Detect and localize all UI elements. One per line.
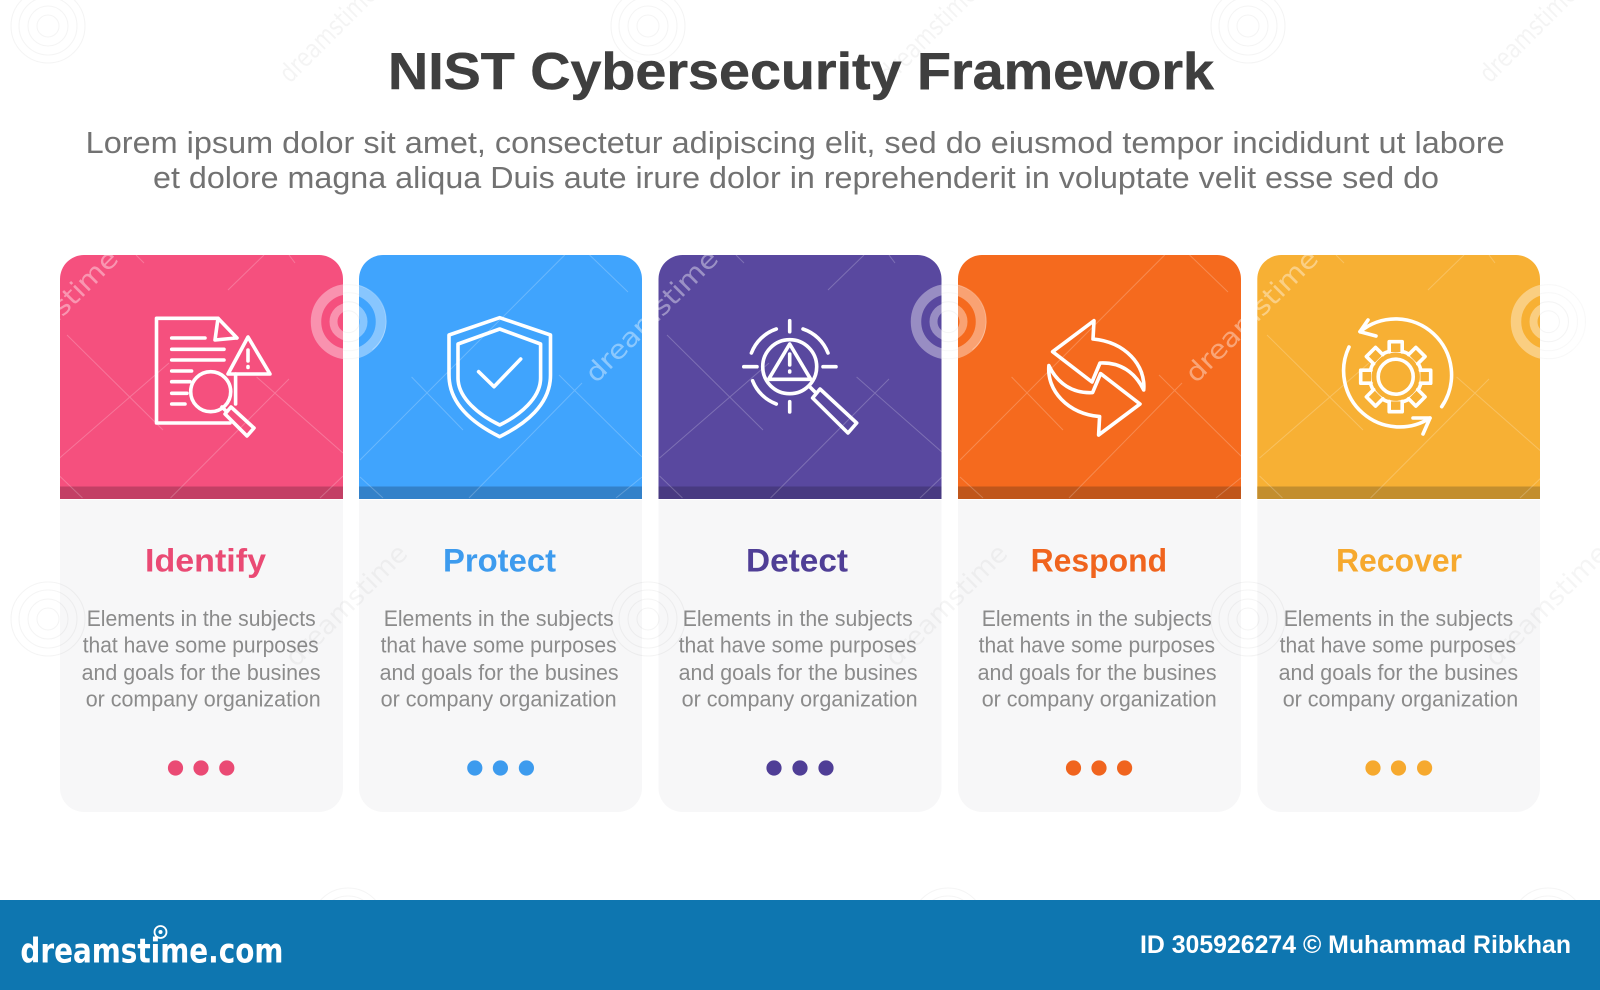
watermark overlay: dreamstime bbox=[1180, 244, 1325, 389]
body text: protect: and goals for the busines bbox=[380, 660, 619, 685]
body text: respond: and goals for the busines bbox=[978, 660, 1217, 685]
body text: protect bbox=[380, 606, 619, 712]
footer bar bbox=[0, 900, 1600, 990]
dots: protect bbox=[467, 760, 534, 776]
body text: detect: or company organization bbox=[682, 687, 918, 712]
watermark overlay: dreamstime bbox=[580, 244, 725, 389]
body text: detect: and goals for the busines bbox=[679, 660, 918, 685]
body text: identify: Elements in the subjects bbox=[87, 606, 316, 631]
heading: detect: Detect bbox=[746, 543, 848, 579]
body text: identify: that have some purposes bbox=[83, 633, 319, 658]
panel: protect bbox=[359, 255, 642, 812]
body text: recover: that have some purposes bbox=[1280, 633, 1516, 658]
panel: recover bbox=[1257, 255, 1540, 812]
heading: recover: Recover bbox=[1336, 543, 1462, 579]
heading: protect: Protect bbox=[443, 543, 556, 579]
dots: recover bbox=[1365, 760, 1432, 776]
subtitle text: et dolore magna aliqua Duis aute irure dolor in reprehenderit in voluptate velit esse sed do bbox=[153, 160, 1439, 195]
body text: identify: or company organization bbox=[86, 687, 321, 712]
heading: respond: Respond bbox=[1031, 543, 1167, 579]
icon: gear with recovery arrows bbox=[1344, 319, 1452, 434]
body text: recover: and goals for the busines bbox=[1279, 660, 1518, 685]
body text: protect: Elements in the subjects bbox=[384, 606, 614, 631]
body text: protect: or company organization bbox=[381, 687, 617, 712]
icon: response arrows bbox=[1049, 321, 1144, 435]
dots: identify bbox=[168, 760, 234, 776]
body text: respond: Elements in the subjects bbox=[982, 606, 1212, 631]
footer credit: ID 305926274 © Muhammad Ribkhan bbox=[1140, 931, 1571, 959]
icon: magnifier with warning bbox=[744, 321, 857, 433]
panel: respond bbox=[958, 255, 1241, 812]
dots: detect bbox=[766, 760, 834, 776]
watermark overlay bbox=[0, 244, 1600, 673]
watermark overlay: dreamstime bbox=[880, 539, 1014, 673]
icon: document audit with warning bbox=[156, 318, 270, 436]
body text: detect: that have some purposes bbox=[679, 633, 917, 658]
body text: identify bbox=[82, 606, 321, 712]
body text: recover: Elements in the subjects bbox=[1284, 606, 1513, 631]
body text: recover: or company organization bbox=[1283, 687, 1518, 712]
body text: respond: or company organization bbox=[982, 687, 1217, 712]
body text: respond bbox=[978, 606, 1217, 712]
body text: detect: Elements in the subjects bbox=[683, 606, 913, 631]
title: NIST Cybersecurity Framework bbox=[388, 43, 1214, 101]
icon: shield with check bbox=[449, 318, 550, 437]
footer logo: dreamstime.com bbox=[20, 932, 283, 972]
body text: detect bbox=[679, 606, 918, 712]
dots: respond bbox=[1066, 760, 1132, 776]
subtitle text: Lorem ipsum dolor sit amet, consectetur adipiscing elit, sed do eiusmod tempor incididunt ut labore bbox=[86, 125, 1505, 160]
body text: identify: and goals for the busines bbox=[82, 660, 321, 685]
panel: identify bbox=[60, 255, 343, 812]
watermark overlay: dreamstime bbox=[280, 539, 414, 673]
body text: recover bbox=[1279, 606, 1518, 712]
heading: identify: Identify bbox=[145, 543, 266, 579]
body text: respond: that have some purposes bbox=[979, 633, 1215, 658]
panel: detect bbox=[658, 255, 942, 812]
subtitle text bbox=[86, 125, 1505, 195]
body text: protect: that have some purposes bbox=[381, 633, 617, 658]
